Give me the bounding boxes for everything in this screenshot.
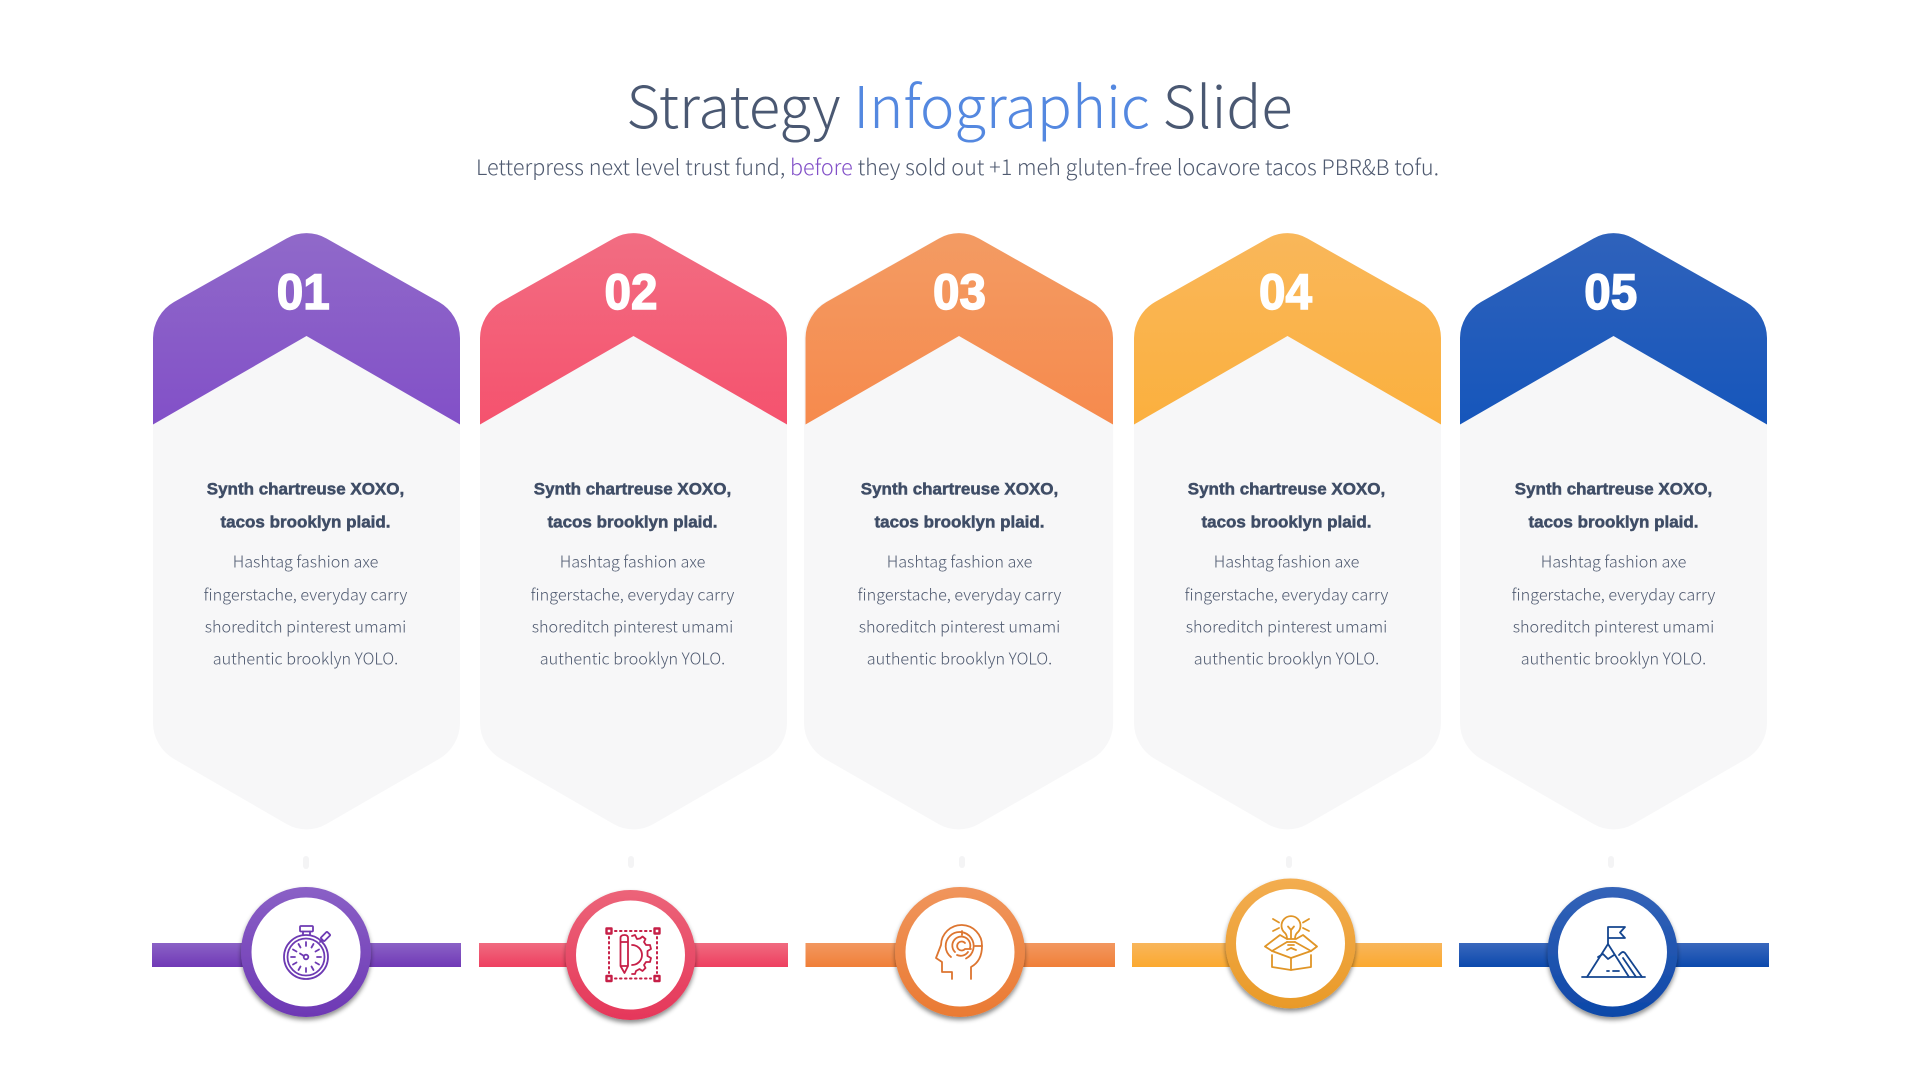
timeline node 01 [152, 887, 461, 1017]
text block 01: fingerstache, everyday carry [204, 582, 407, 606]
card background 01 [153, 233, 460, 829]
text block 05: authentic brooklyn YOLO. [1521, 646, 1706, 670]
number 01: 01 [277, 264, 330, 320]
number 04: 04 [1259, 264, 1312, 320]
bar 02 [479, 943, 788, 967]
text block 01: Synth chartreuse XOXO, [207, 480, 404, 498]
text block 03: Synth chartreuse XOXO, [861, 480, 1058, 498]
header chevron 01 [153, 233, 460, 424]
text block 02: Synth chartreuse XOXO, [534, 480, 731, 498]
text block 02: shoreditch pinterest umami [532, 614, 733, 638]
title: Strategy Infographic Slide [626, 61, 1293, 145]
text block 05: fingerstache, everyday carry [1512, 582, 1715, 606]
header chevron 05 [1460, 233, 1767, 424]
connector ticks [303, 856, 1614, 869]
text block 04: Hashtag fashion axe [1214, 548, 1360, 572]
text block 02 [531, 480, 734, 670]
text block 05 [1512, 480, 1715, 670]
icon: head with maze [936, 925, 982, 979]
ring 02 [566, 890, 696, 1020]
icon: stopwatch [284, 926, 330, 979]
panel: step 05 [1460, 233, 1767, 829]
header chevron 03 [806, 233, 1113, 424]
text block 05: Synth chartreuse XOXO, [1515, 480, 1712, 498]
text block 04: tacos brooklyn plaid. [1201, 512, 1372, 532]
text block 04: shoreditch pinterest umami [1186, 614, 1387, 638]
text block 04: authentic brooklyn YOLO. [1194, 646, 1379, 670]
text block 02: fingerstache, everyday carry [531, 582, 734, 606]
number 05: 05 [1584, 264, 1637, 320]
icon: idea box [1265, 916, 1317, 970]
text block 01: Hashtag fashion axe [233, 548, 379, 572]
text block 03: tacos brooklyn plaid. [874, 512, 1045, 532]
number 03: 03 [933, 264, 986, 320]
ring 03 [895, 887, 1025, 1017]
card background 03 [804, 233, 1113, 829]
timeline node 02 [479, 890, 788, 1020]
text block 03: Hashtag fashion axe [887, 548, 1033, 572]
text block 03: fingerstache, everyday carry [858, 582, 1061, 606]
icon: pencil and gear [606, 928, 660, 981]
timeline node 05 [1459, 887, 1769, 1017]
text block 01: tacos brooklyn plaid. [220, 512, 391, 532]
header chevron 02 [480, 233, 787, 424]
bar 03 [806, 943, 1115, 967]
card background 04 [1134, 233, 1441, 829]
panel: step 02 [480, 233, 787, 829]
ring 05 [1548, 887, 1678, 1017]
text block 02: authentic brooklyn YOLO. [540, 646, 725, 670]
text block 03 [858, 480, 1061, 670]
card background 02 [480, 233, 787, 829]
subtitle: Letterpress next level trust fund, before they sold out +1 meh gluten-free locavore tacos PBR&B tofu. [476, 151, 1439, 182]
text block 04: fingerstache, everyday carry [1185, 582, 1388, 606]
icon: mountain flag [1582, 927, 1645, 977]
panel: step 03 [804, 233, 1113, 829]
bar 04 [1132, 943, 1442, 967]
ring 04 [1226, 878, 1356, 1008]
bar 01 [152, 943, 461, 967]
text block 05: shoreditch pinterest umami [1513, 614, 1714, 638]
bar 05 [1459, 943, 1769, 967]
panel: step 04 [1134, 233, 1441, 829]
text block 05: Hashtag fashion axe [1541, 548, 1687, 572]
text block 01: shoreditch pinterest umami [205, 614, 406, 638]
text block 01 [204, 480, 407, 670]
panel: step 01 [153, 233, 460, 829]
text block 03: authentic brooklyn YOLO. [867, 646, 1052, 670]
text block 02: Hashtag fashion axe [560, 548, 706, 572]
text block 02: tacos brooklyn plaid. [547, 512, 718, 532]
text block 04 [1185, 480, 1388, 670]
text block 05: tacos brooklyn plaid. [1528, 512, 1699, 532]
ring 01 [241, 887, 371, 1017]
number 02: 02 [604, 264, 658, 320]
text block 01: authentic brooklyn YOLO. [213, 646, 398, 670]
card background 05 [1460, 233, 1767, 829]
text block 03: shoreditch pinterest umami [859, 614, 1060, 638]
header chevron 04 [1134, 233, 1441, 424]
timeline node 04 [1132, 878, 1442, 1008]
timeline node 03 [806, 887, 1115, 1017]
text block 04: Synth chartreuse XOXO, [1188, 480, 1385, 498]
